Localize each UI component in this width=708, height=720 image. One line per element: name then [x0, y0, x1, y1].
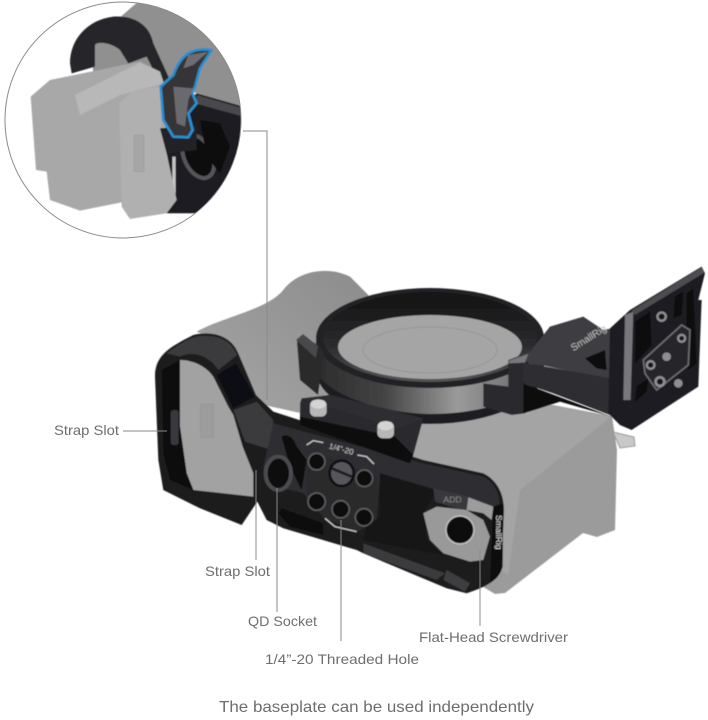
screw slot — [332, 468, 352, 477]
plate hole centers — [648, 314, 684, 385]
ring silver band — [316, 340, 544, 414]
cage frame top highlight — [167, 336, 237, 370]
inset latch dark surround — [160, 125, 197, 153]
plate raised center — [643, 325, 690, 390]
door recess — [201, 404, 213, 437]
ADD mark: ADD — [443, 495, 462, 505]
ring left tab — [297, 336, 324, 395]
inset frame loop — [70, 17, 170, 83]
lower left pocket — [278, 508, 323, 535]
inset camera body — [92, 3, 240, 106]
left strap slot — [171, 410, 179, 445]
baseplate cage — [155, 333, 504, 593]
clamp top — [302, 395, 423, 428]
inset plate highlight — [195, 95, 243, 117]
silver screwdriver — [423, 507, 490, 562]
arm lower cavity — [523, 383, 612, 417]
ring inner wall — [323, 292, 537, 382]
ring lower band — [316, 316, 544, 424]
screwdriver hole — [446, 516, 474, 544]
latch — [233, 402, 273, 450]
arm front — [523, 363, 612, 416]
arm lower block — [483, 357, 525, 415]
ADD block — [433, 488, 468, 512]
caption: The baseplate can be used independently — [219, 699, 534, 716]
SmallRig logo: SmallRig — [494, 515, 504, 550]
inset detail circle — [5, 0, 247, 240]
bottom wedge — [443, 570, 470, 592]
left screw head — [311, 399, 326, 409]
plate cavities — [635, 288, 697, 402]
ring left tab highlight — [296, 334, 318, 358]
inset blue latch outline — [161, 49, 212, 137]
arm edge highlight — [509, 354, 528, 363]
label: threaded hole: 1/4”-20 Threaded Hole — [265, 651, 419, 667]
inset latch highlight — [183, 52, 208, 68]
center screw — [330, 461, 354, 486]
battery door window — [180, 360, 253, 497]
arm top — [508, 317, 612, 380]
inset battery door — [119, 87, 177, 219]
camera top surface — [280, 340, 612, 575]
thread plate — [307, 457, 377, 532]
inset ring outline — [5, 2, 241, 238]
inset strap ring — [180, 134, 217, 181]
arm logo: SmallRig — [569, 323, 609, 354]
inset battery top face — [75, 63, 164, 115]
lens cap inner circle — [363, 327, 497, 373]
clamp block — [300, 395, 423, 463]
right screw — [377, 422, 394, 438]
thread arc marks — [307, 441, 374, 532]
plate body — [608, 267, 705, 430]
leader lines — [123, 131, 480, 641]
inset latch face — [173, 87, 193, 127]
camera side body — [400, 400, 617, 594]
inset battery door recess — [134, 135, 144, 172]
plate top edge — [632, 267, 704, 315]
QD ring — [266, 457, 291, 490]
camera strap lug — [613, 432, 635, 448]
cage silhouette — [155, 333, 504, 593]
clamp front shade — [300, 417, 413, 463]
camera grip — [197, 271, 370, 417]
mount ring — [296, 288, 544, 424]
plate holes — [646, 311, 686, 388]
label: strap slot left: Strap Slot — [54, 422, 119, 438]
right screw head — [378, 421, 393, 430]
inset battery — [31, 62, 167, 211]
label: QD socket: QD Socket — [248, 613, 317, 629]
camera and cage product — [155, 267, 705, 594]
thread size mark: 1/4”-20 — [328, 442, 355, 457]
plate left edge — [623, 312, 633, 400]
right pocket — [363, 473, 443, 555]
ring outer — [316, 288, 544, 388]
left screw — [310, 400, 327, 417]
inset pin — [172, 157, 176, 193]
label: flat-head screwdriver: Flat-Head Screwdriver — [419, 629, 568, 645]
silver corner — [467, 497, 493, 520]
latch column — [217, 363, 255, 408]
QD slot — [282, 435, 307, 490]
inset slot — [200, 120, 230, 173]
inset bright lower plate area — [200, 160, 247, 240]
left wall shade — [162, 360, 193, 490]
label: strap slot bottom: Strap Slot — [205, 563, 270, 579]
side strip — [490, 503, 503, 582]
lens cap — [338, 315, 522, 379]
main plate face — [263, 423, 500, 532]
threaded holes — [308, 453, 373, 526]
right arm and cold shoe plate — [483, 267, 705, 430]
inset dark baseplate — [166, 92, 240, 214]
arm cavity — [585, 350, 607, 370]
lower pocket edge — [363, 543, 445, 580]
